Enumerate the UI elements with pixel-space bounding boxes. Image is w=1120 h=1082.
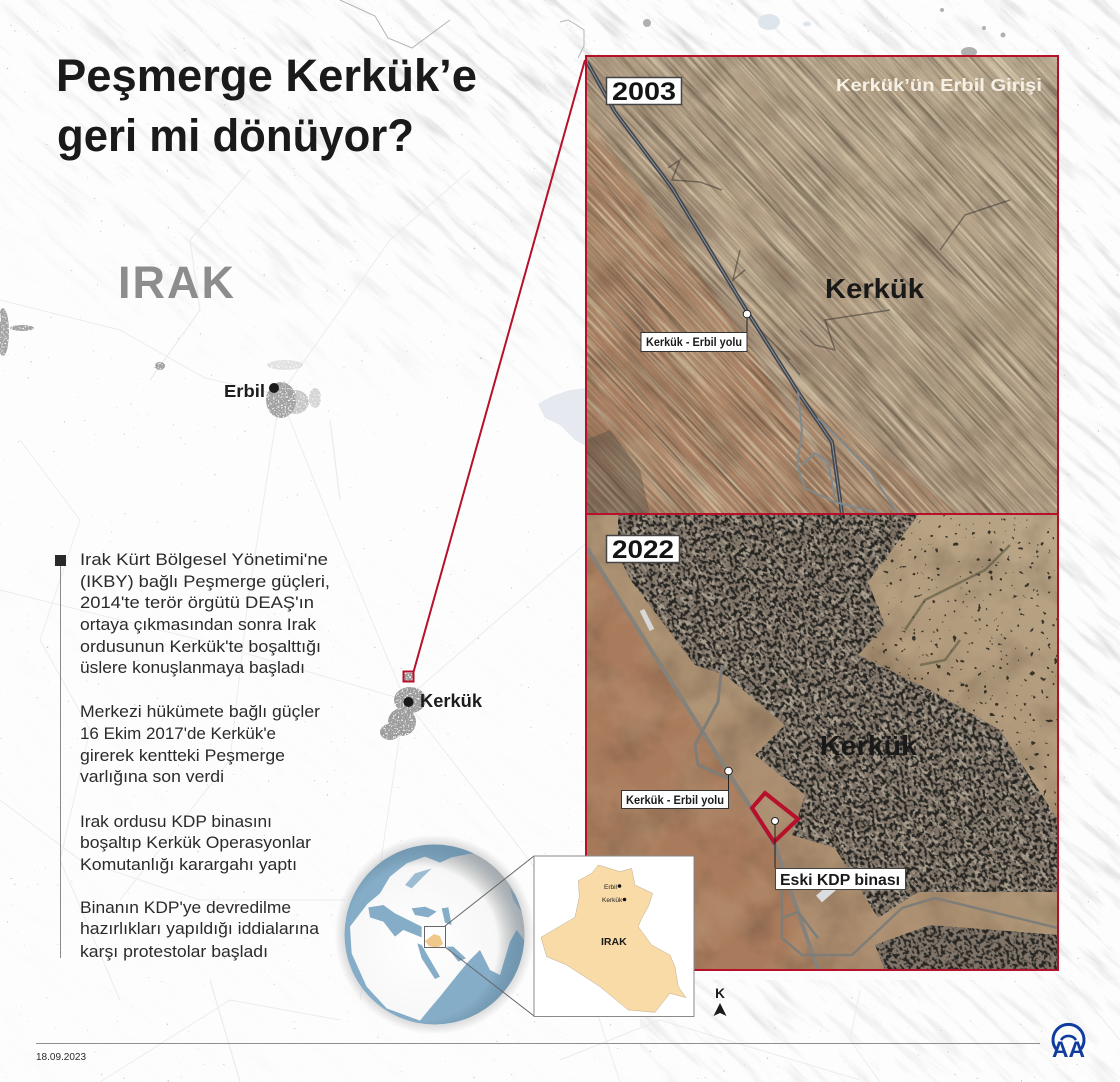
date: 18.09.2023 <box>36 1052 86 1063</box>
highlighted building: Eski KDP binası <box>752 793 906 890</box>
map label: Kerkük 2022: Kerkük <box>820 730 918 761</box>
body text timeline: Komutanlığı karargahı yaptı <box>80 856 297 874</box>
road marker 2022: Kerkük - Erbil yolu <box>626 795 724 807</box>
panel: 2022 satellite image <box>586 514 1058 970</box>
body text timeline: ordusunun Kerkük'te boşalttığı <box>80 638 321 656</box>
body text timeline: boşaltıp Kerkük Operasyonlar <box>80 834 312 852</box>
body text timeline: ortaya çıkmasından sonra Irak <box>80 616 317 634</box>
footer rule <box>36 1043 1040 1044</box>
body text timeline: 16 Ekim 2017'de Kerkük'e <box>80 725 276 743</box>
Kerkük urban area <box>380 673 426 740</box>
road marker 2022 <box>622 767 732 808</box>
body text timeline: (IKBY) bağlı Peşmerge güçleri, <box>80 573 330 591</box>
lake <box>538 388 586 446</box>
body text timeline: Merkezi hükümete bağlı güçler <box>80 703 321 721</box>
year badge 2003: 2003 <box>612 78 676 106</box>
inset map: Iraq: Erbil <box>604 884 618 891</box>
body text timeline: Irak Kürt Bölgesel Yönetimi'ne <box>80 551 328 569</box>
city label: Erbil: Erbil <box>224 381 265 401</box>
title: Peşmerge Kerkük’e <box>56 50 477 101</box>
body text timeline <box>55 551 330 961</box>
body text timeline: girerek kentteki Peşmerge <box>80 747 285 765</box>
year badge 2022: 2022 <box>612 536 674 564</box>
body text timeline: karşı protestolar başladı <box>80 943 268 961</box>
globe <box>337 837 534 1032</box>
body text timeline: üslere konuşlanmaya başladı <box>80 659 305 677</box>
panel: 2003 satellite image <box>586 56 1058 514</box>
body text timeline: varlığına son verdi <box>80 768 224 786</box>
city label: Kerkük: Kerkük <box>420 690 483 711</box>
highlighted building: Eski KDP binası: Eski KDP binası <box>780 872 900 889</box>
road marker 2003: Kerkük - Erbil yolu <box>646 337 742 349</box>
heading: Kerkük'ün Erbil Girişi: Kerkük’ün Erbil Girişi <box>836 75 1042 95</box>
inset map: Iraq: Kerkük <box>602 897 623 904</box>
body text timeline: hazırlıkları yapıldığı iddialarına <box>80 920 320 938</box>
logo: Anadolu Agency: AA <box>1052 1037 1085 1062</box>
body text timeline: 2014'te terör örgütü DEAŞ'ın <box>80 594 314 612</box>
title <box>56 50 477 161</box>
north arrow: K <box>715 986 725 1001</box>
body text timeline: Irak ordusu KDP binasını <box>80 813 272 831</box>
inset map: Iraq <box>534 856 694 1016</box>
body text timeline: Binanın KDP'ye devredilme <box>80 899 291 917</box>
logo: Anadolu Agency <box>1052 1024 1085 1062</box>
road marker 2003 <box>641 310 751 352</box>
Erbil urban area <box>0 308 321 418</box>
north arrow <box>714 986 726 1016</box>
title: geri mi dönüyor? <box>57 110 414 161</box>
inset map: Iraq: IRAK <box>601 936 627 948</box>
red panel frames and zoom connector <box>404 56 1058 970</box>
country label: IRAK: IRAK <box>118 257 234 308</box>
map label: Kerkük 2003: Kerkük <box>825 273 925 304</box>
